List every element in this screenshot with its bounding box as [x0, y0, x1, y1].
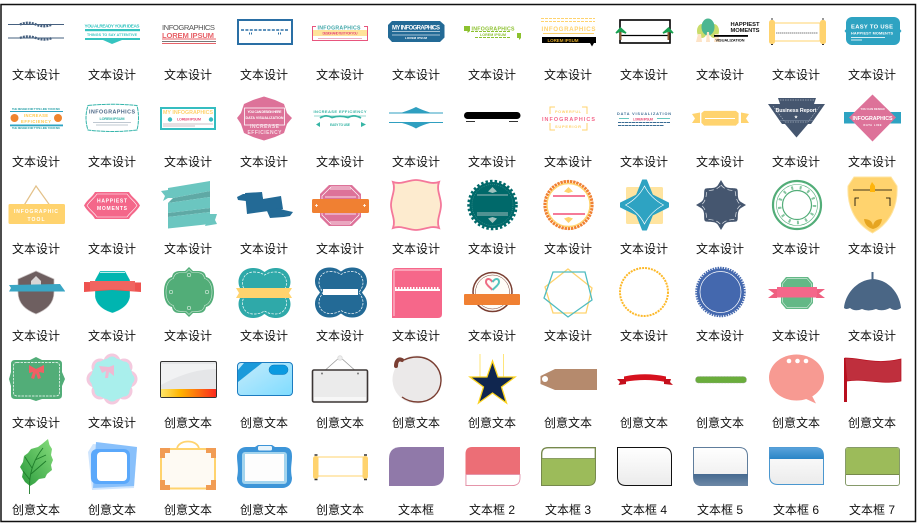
label: 文本设计: [772, 67, 820, 82]
icon: happiest moments trees: [696, 18, 760, 42]
label: 文本设计: [468, 241, 516, 256]
row 3 item 5: [312, 185, 369, 256]
icon: navy star with gold outline: [470, 354, 515, 403]
icon: brown shield with blue banner: [9, 271, 65, 314]
label: 文本框: [398, 502, 434, 517]
icon: teal scalloped infographics frame: LOREM IPSUM: [100, 117, 124, 121]
label: 文本设计: [696, 154, 744, 169]
label: 文本设计: [848, 328, 896, 343]
icon: teal shield with red ribbon: [84, 271, 141, 313]
icon: pink framed infographics: [312, 26, 368, 40]
icon: pink octagon efficiency badge: [237, 96, 292, 140]
icon: orange decreased efficiency banner: THE DESIGN FOR TYPE LINE YOUR INK: [12, 107, 60, 111]
row 5 item 9: [617, 374, 673, 430]
icon: green octagon with pink ribbon: [768, 277, 825, 309]
label: 文本设计: [620, 67, 668, 82]
label: 创意文本: [240, 415, 288, 430]
icon: yellow scroll: [769, 19, 826, 44]
icon: purple text box: [389, 447, 444, 486]
row 2 item 9: [617, 112, 671, 169]
label: 文本设计: [88, 328, 136, 343]
row 5 item 12: [844, 358, 901, 430]
label: 文本设计: [316, 67, 364, 82]
icon: dotted gold circle: [620, 268, 668, 316]
icon: infographics lorem ipsum title: [162, 23, 216, 44]
row 4 item 1: [9, 271, 65, 343]
icon: infographics lorem ipsum title: LOREM IPSUM: [162, 31, 214, 40]
icon: pink octagon efficiency badge: YOU CAN DESIGN HERE: [248, 110, 282, 114]
row 2 item 3: [161, 108, 215, 169]
icon: green leaf: [20, 439, 53, 494]
icon: yellow shield: [848, 177, 897, 233]
row 1 item 12: [844, 17, 902, 82]
icon: blue seal circle: [696, 268, 744, 316]
label: 文本设计: [12, 328, 60, 343]
label: 文本设计: [12, 67, 60, 82]
icon: dark blue folded ribbon: [237, 192, 293, 218]
icon: pink happiest moments badge: HAPPIEST: [97, 198, 127, 204]
icon: yellow suitcase frame: [160, 442, 216, 490]
icon: blue infographics badge: LOREM IPSUM: [405, 36, 428, 40]
label: 创意文本: [164, 502, 212, 517]
label: 文本设计: [12, 154, 60, 169]
label: 文本设计: [848, 241, 896, 256]
row 5 item 7: [468, 354, 516, 430]
row 4 item 8: [544, 269, 592, 343]
row 2 item 2: [86, 104, 138, 169]
label: 创意文本: [544, 415, 592, 430]
label: 文本框 3: [545, 502, 591, 517]
label: 文本设计: [544, 154, 592, 169]
icon: green infographics: INFOGRAPHICS: [472, 26, 515, 32]
row 1 item 1: [8, 23, 64, 82]
label: 创意文本: [620, 415, 668, 430]
icon: orange decreased efficiency banner: THE DESIGN FOR TYPE LINE YOUR INK: [12, 126, 60, 130]
icon: pink top text box: [466, 447, 520, 486]
icon: teal framed my infographics: [161, 108, 215, 129]
label: 创意文本: [392, 415, 440, 430]
icon: blue infographics badge: [388, 21, 444, 42]
label: 文本框 2: [469, 502, 515, 517]
row 4 item 12: [844, 272, 901, 343]
row 1 item 5: [312, 26, 368, 82]
icon: green infographics: [464, 26, 521, 40]
label: 文本设计: [392, 328, 440, 343]
label: 文本设计: [468, 67, 516, 82]
label: 文本设计: [620, 241, 668, 256]
icon: blue outlined rectangle: [238, 20, 292, 44]
icon: yellow infographics with black bar: LOREM IPSUM: [548, 38, 579, 43]
label: 文本设计: [772, 241, 820, 256]
icon: pink framed infographics: DESIGN AND TEXT FOR YOU: [322, 32, 358, 36]
label: 文本设计: [620, 154, 668, 169]
icon: pink octagon efficiency badge: DATA VISUALIZATION: [246, 116, 284, 120]
icon: teal framed my infographics: LOREM IPSUM: [177, 118, 201, 122]
label: 文本框 4: [621, 502, 667, 517]
icon: teal scalloped infographics frame: INFOGRAPHICS: [89, 110, 135, 116]
row 5 item 11: [769, 354, 824, 430]
label: 文本设计: [620, 328, 668, 343]
row 2 item 8: [542, 107, 595, 169]
icon: blue star diamond on yellow square: [620, 180, 668, 230]
icon: blue infographics badge: MY INFOGRAPHICS: [392, 26, 440, 32]
row 2 item 7: [464, 112, 520, 169]
icon: hanging yellow sign: TOOL: [28, 217, 44, 223]
row 4 item 5: [315, 268, 367, 343]
row 3 item 7: [468, 181, 516, 256]
icon: teal framed my infographics: MY INFOGRAPHICS: [163, 110, 213, 116]
icon: easy to use badge: HAPPIEST MOMENTS: [851, 32, 893, 36]
icon: teal folded ribbon: [161, 181, 217, 228]
icon: data visualization text: DATA VISUALIZATION: [617, 112, 671, 116]
label: 文本设计: [12, 241, 60, 256]
label: 文本设计: [240, 241, 288, 256]
label: 文本设计: [544, 67, 592, 82]
icon: easy to use badge: [844, 17, 902, 45]
row 3 item 10: [696, 180, 746, 256]
icon: teal increase efficiency ornament: INCREASE EFFICIENCY: [314, 109, 367, 114]
label: 创意文本: [12, 502, 60, 517]
row 6 item 3: [160, 442, 216, 517]
icon: blue quatrefoil with white band: [315, 268, 367, 318]
label: 创意文本: [316, 502, 364, 517]
label: 文本设计: [696, 328, 744, 343]
icon: cyan flower with pink bow: [86, 354, 138, 404]
icon: blue umbrella dome: [844, 272, 901, 310]
label: 文本设计: [772, 328, 820, 343]
icon: teal increase efficiency ornament: [314, 109, 367, 127]
label: 文本设计: [12, 415, 60, 430]
icon: overlapping pentagons: [544, 269, 592, 317]
icon: pink speech bubble: [769, 354, 824, 404]
label: 创意文本: [88, 502, 136, 517]
label: 文本框 7: [849, 502, 895, 517]
icon: easy to use badge: EASY TO USE: [851, 24, 893, 30]
icon: pink diamond infographics: [844, 94, 901, 142]
label: 文本设计: [88, 415, 136, 430]
icon: happiest moments trees: HAPPIEST: [730, 22, 760, 28]
icon: teal increase efficiency ornament: EASY TO USE: [330, 123, 351, 127]
icon: pink diamond infographics: DATA LINE: [864, 123, 882, 127]
icon: happiest moments trees: MOMENTS: [730, 28, 760, 34]
row 3 item 3: [161, 181, 217, 256]
label: 文本设计: [544, 241, 592, 256]
icon: green stitched bar: [696, 376, 746, 383]
label: 文本框 5: [697, 502, 743, 517]
row 1 item 11: [769, 19, 826, 82]
icon: data visualization text: [617, 112, 671, 126]
label: 创意文本: [316, 415, 364, 430]
row 2 item 6: [389, 107, 443, 169]
row 6 item 10: [694, 448, 748, 517]
label: 文本设计: [848, 154, 896, 169]
row 3 item 9: [620, 180, 668, 256]
icon: navy business report badge: [768, 98, 825, 138]
label: 文本设计: [88, 154, 136, 169]
icon: yellow ribbon plaque: [692, 110, 749, 126]
row 2 item 1: [10, 107, 63, 169]
row 6 item 5: [313, 455, 368, 517]
row 6 item 2: [88, 442, 137, 517]
label: 文本设计: [392, 67, 440, 82]
icon: teal banner with arrow: YOU ALREADY YOUR IDEAS: [84, 24, 140, 28]
row 4 item 9: [620, 268, 668, 343]
label: 文本框 6: [773, 502, 819, 517]
row 4 item 7: [464, 272, 520, 343]
row 3 item 8: [544, 182, 592, 256]
row 4 item 11: [768, 277, 825, 343]
icon: black rounded bar: [464, 112, 520, 122]
icon: pink framed infographics: INFOGRAPHICS: [318, 26, 361, 32]
icon: teal quatrefoil with yellow band: [236, 268, 292, 318]
icon: pink happiest moments badge: MOMENTS: [97, 206, 128, 212]
label: 文本设计: [392, 154, 440, 169]
icon: sky blue box with tab: [238, 362, 292, 396]
icon: green frame with red bow: [9, 357, 65, 401]
label: 文本设计: [164, 241, 212, 256]
label: 文本设计: [392, 241, 440, 256]
icon: pink infographics corners: INFOGRAPHICS: [542, 117, 595, 123]
icon: green ornate badge: [164, 267, 214, 317]
icon: yellow infographics with black bar: [541, 18, 596, 46]
row 2 item 4: [237, 96, 292, 169]
icon: orange decreased efficiency banner: EFFICIENCY: [21, 119, 51, 124]
icon: black frame with palm trees: [616, 20, 673, 43]
icon: yellow scroll: [313, 455, 368, 480]
label: 文本设计: [696, 67, 744, 82]
row 6 item 4: [237, 445, 292, 517]
label: 文本设计: [468, 154, 516, 169]
row 1 item 6: [388, 21, 444, 82]
icon: infographics lorem ipsum title: INFOGRAPHICS: [162, 23, 215, 32]
icon: blue tablet frame: [237, 445, 292, 488]
icon: green infographics: LOREM IPSUM: [480, 33, 506, 37]
row 3 item 1: [8, 186, 65, 256]
icon: green ring wreath: [773, 181, 821, 229]
row 6 item 12: [846, 448, 900, 517]
row 6 item 1: [12, 439, 60, 517]
icon: brown ring with ear: [392, 356, 441, 404]
label: 文本设计: [164, 328, 212, 343]
row 4 item 6: [392, 268, 442, 343]
row 6 item 9: [618, 448, 672, 517]
row 1 item 3: [162, 23, 216, 82]
row 2 item 5: [314, 109, 367, 169]
icon: navy ornate star: [696, 180, 746, 230]
label: 文本设计: [544, 328, 592, 343]
icon: teal scalloped infographics frame: [86, 104, 138, 132]
icon: pink square with zigzag: [392, 268, 442, 318]
label: 文本设计: [164, 154, 212, 169]
label: 文本设计: [316, 328, 364, 343]
row 6 item 11: [770, 448, 824, 517]
icon: white rounded text box: [618, 448, 672, 486]
icon: yellow infographics with black bar: INFOGRAPHICS: [542, 26, 596, 33]
row 3 item 6: [391, 180, 441, 256]
icon: dark teal seal: [468, 181, 516, 229]
icon: blue ornamental lines: [389, 107, 443, 128]
icon: grey box with orange gradient: [160, 362, 216, 398]
label: 文本设计: [88, 67, 136, 82]
icon: red curved ribbon: [617, 374, 673, 385]
icon: navy business report badge: Business Report: [776, 108, 817, 114]
icon: pink infographics corners: SUPERIOR: [555, 124, 581, 129]
row 3 item 12: [848, 177, 897, 256]
label: 文本设计: [316, 154, 364, 169]
label: 创意文本: [772, 415, 820, 430]
row 4 item 2: [84, 271, 141, 343]
row 3 item 11: [772, 181, 821, 256]
row 5 item 8: [540, 369, 597, 430]
row 2 item 12: [844, 94, 901, 169]
icon: teal banner with arrow: THINGS TO SAY ATTENTIVE: [87, 33, 138, 37]
icon: orange decreased efficiency banner: INCREASE: [24, 113, 48, 118]
icon: pink happiest moments badge: [84, 192, 140, 219]
label: 创意文本: [240, 502, 288, 517]
row 2 item 11: [768, 98, 825, 169]
icon: blue brushed square frame: [88, 442, 137, 490]
label: 文本设计: [240, 154, 288, 169]
row 2 item 10: [692, 110, 749, 169]
icon: pink octagon efficiency badge: INCREASE: [250, 124, 280, 130]
label: 创意文本: [468, 415, 516, 430]
icon: navy business report badge: ★: [794, 114, 798, 119]
icon: hanging yellow sign: INFOGRAPHIC: [14, 209, 58, 215]
row 6 item 7: [466, 447, 520, 517]
row 1 item 2: [84, 24, 140, 82]
icon: ornamental dividers: [8, 23, 64, 40]
row 1 item 4: [238, 20, 292, 82]
label: 文本设计: [696, 241, 744, 256]
icon: brown ring with orange bar: [464, 272, 520, 312]
row 3 item 2: [84, 192, 140, 256]
icon: brown price tag: [540, 369, 597, 390]
icon: happiest moments trees: VISUALIZATION: [716, 38, 745, 42]
row 1 item 9: [616, 20, 673, 82]
row 1 item 7: [464, 26, 521, 82]
label: 文本设计: [88, 241, 136, 256]
label: 创意文本: [164, 415, 212, 430]
row 3 item 4: [237, 192, 293, 256]
row 5 item 10: [696, 376, 746, 430]
row 5 item 3: [160, 362, 216, 430]
icon: orange decreased efficiency banner: [10, 107, 63, 130]
row 1 item 8: [541, 18, 596, 82]
icon: slate footer text box: [694, 448, 748, 486]
label: 创意文本: [848, 415, 896, 430]
icon: pink infographics corners: [542, 107, 595, 130]
icon: cream curvy frame: [391, 180, 441, 230]
row 5 item 5: [312, 356, 368, 430]
label: 文本设计: [468, 328, 516, 343]
row 6 item 8: [542, 448, 596, 517]
row 4 item 3: [164, 267, 214, 343]
label: 创意文本: [696, 415, 744, 430]
row 4 item 10: [696, 268, 744, 343]
label: 文本设计: [164, 67, 212, 82]
row 5 item 2: [86, 354, 138, 430]
row 4 item 4: [236, 268, 292, 343]
icon: hanging yellow sign: [8, 186, 65, 224]
icon: pink octagon with orange band: [312, 185, 369, 226]
icon: data visualization text: LOREM IPSUM: [633, 118, 653, 122]
icon: pink diamond infographics: INFOGRAPHICS: [852, 116, 893, 122]
icon: red flag: [844, 358, 901, 402]
icon: orange seal: [545, 182, 592, 228]
icon: teal banner with arrow: [84, 24, 140, 44]
label: 文本设计: [772, 154, 820, 169]
row 1 item 10: [696, 18, 760, 82]
icon: pink diamond infographics: YOU CAN DESIGN: [860, 107, 885, 111]
icon: green text box: [542, 448, 596, 486]
label: 文本设计: [316, 241, 364, 256]
label: 文本设计: [240, 328, 288, 343]
row 6 item 6: [389, 447, 444, 517]
icon: blue header text box: [770, 448, 824, 484]
row 5 item 6: [392, 356, 441, 430]
row 5 item 1: [9, 357, 65, 430]
label: 文本设计: [240, 67, 288, 82]
icon: pink infographics corners: POWERFUL: [555, 110, 582, 114]
icon: olive header text box: [846, 448, 900, 486]
icon: pink octagon efficiency badge: EFFICIENCY: [248, 130, 282, 136]
icon: hanging grey board: [312, 356, 368, 402]
row 5 item 4: [238, 362, 292, 430]
label: 文本设计: [848, 67, 896, 82]
